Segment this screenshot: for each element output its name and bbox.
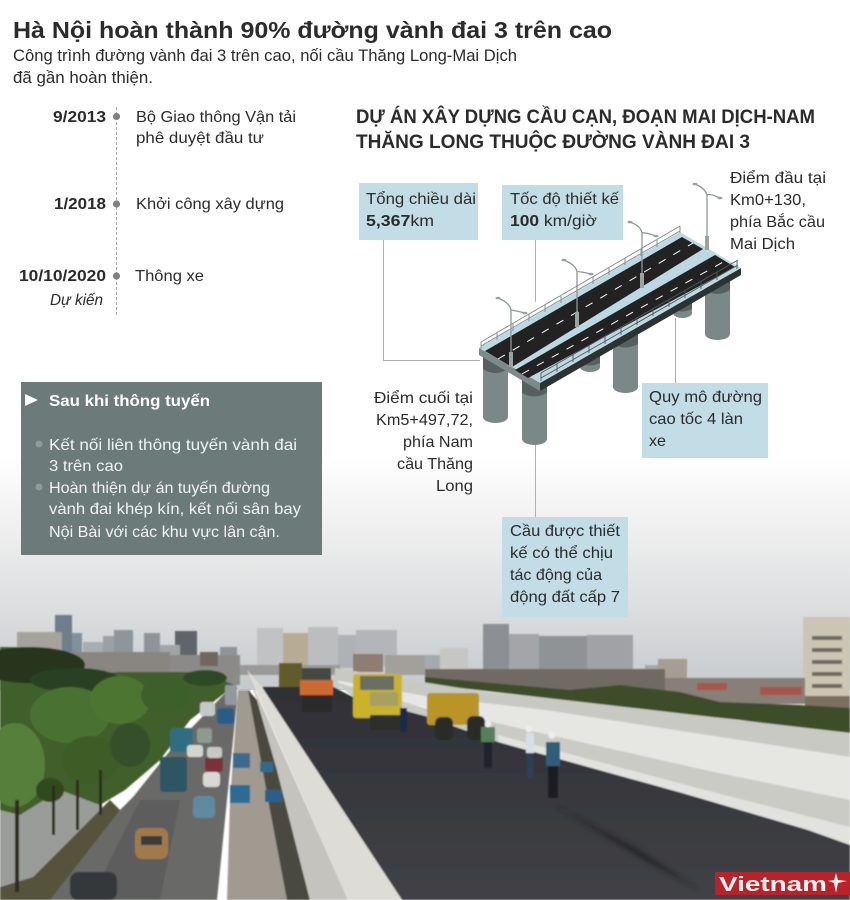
- right skyline: [425, 655, 440, 670]
- panel heading: Sau khi thông tuyến: [49, 393, 210, 410]
- central skyline: [257, 628, 283, 670]
- logo: Vietnam+: Vietnam: [719, 874, 827, 896]
- subtitle: đã gần hoàn thiện.: [13, 69, 153, 87]
- background photo: road construction: [0, 455, 850, 900]
- deck top: [479, 232, 741, 383]
- callout: total length: Tổng chiều dài: [366, 190, 476, 208]
- concrete parapet, left: [247, 672, 348, 900]
- callout: road scale: cao tốc 4 làn: [649, 411, 743, 428]
- deck side: [540, 268, 741, 391]
- callout: design speed: [502, 185, 623, 240]
- asphalt deck: [260, 687, 850, 900]
- milestone: 1/2018: Khởi công xây dựng: [136, 196, 284, 213]
- callout: road scale: Quy mô đường: [649, 389, 762, 406]
- back barrier: [335, 668, 850, 757]
- note: start point: [730, 169, 826, 253]
- bullet list: Nội Bài với các khu vực lân cận.: [49, 524, 280, 541]
- milestone: 10/10/2020: Dự kiến: [50, 292, 103, 309]
- lane markings: [498, 243, 693, 359]
- subtitle: [13, 47, 517, 87]
- left street: [37, 685, 237, 900]
- milestone: 9/2013: Bộ Giao thông Vận tải: [136, 109, 296, 126]
- note: start point: Điểm đầu tại: [730, 169, 826, 187]
- note: end point: Điểm cuối tại: [374, 389, 473, 407]
- bullet list: Hoàn thiện dự án tuyến đường: [49, 480, 270, 497]
- callout: total length: [359, 183, 478, 240]
- bullet list: 3 trên cao: [49, 458, 123, 475]
- note: start point: Mai Dịch: [730, 236, 795, 253]
- callout: earthquake resistance: động đất cấp 7: [510, 589, 620, 606]
- cars: [70, 685, 237, 900]
- milestone: 9/2013: [53, 109, 296, 147]
- workers: [481, 721, 560, 798]
- callout: design speed: Tốc độ thiết kế: [510, 191, 619, 208]
- left sidewalk: [0, 770, 110, 887]
- callout: total length: 5,367 km: [366, 213, 434, 230]
- pillars: [483, 270, 730, 445]
- note: end point: [374, 389, 473, 495]
- lanes: [485, 237, 703, 367]
- bullet list: [36, 437, 301, 541]
- callout: earthquake resistance: [502, 517, 628, 617]
- milestone: 9/2013: phê duyệt đầu tư: [136, 130, 264, 147]
- subtitle: Công trình đường vành đai 3 trên cao, nối cầu Thăng Long-Mai Dịch: [13, 47, 517, 65]
- callout: earthquake resistance: tác động của: [510, 567, 602, 584]
- note: end point: phía Nam: [403, 434, 473, 451]
- low houses: [425, 669, 665, 691]
- left skyline: [55, 615, 72, 655]
- milestone: 9/2013: 9/2013: [53, 109, 106, 126]
- icon: triangle: [25, 394, 38, 406]
- note: end point: Km5+497,72,: [376, 412, 473, 429]
- milestone: 10/10/2020: Thông xe: [135, 268, 204, 285]
- note: end point: cầu Thăng: [397, 456, 473, 473]
- callout: earthquake resistance: Cầu được thiết: [510, 523, 621, 540]
- project heading: THĂNG LONG THUỘC ĐƯỜNG VÀNH ĐAI 3: [356, 129, 750, 153]
- railings: [481, 226, 738, 381]
- white deck, right: [335, 670, 850, 810]
- note: start point: phía Bắc cầu: [730, 212, 825, 231]
- note: end point: Long: [436, 478, 473, 495]
- distant trees, right: [425, 677, 850, 736]
- timeline: [19, 107, 296, 315]
- tree canopy: [0, 647, 235, 815]
- project heading: [356, 104, 815, 153]
- logo: Vietnam+: [715, 872, 850, 896]
- street lamps: [498, 184, 720, 367]
- title: Hà Nội hoàn thành 90% đường vành đai 3 trên cao: [13, 17, 612, 43]
- rollers: [279, 663, 302, 687]
- bullet list: Kết nối liên thông tuyến vành đai: [49, 437, 297, 454]
- bullet list: vành đai khép kín, kết nối sân bay: [49, 501, 301, 518]
- milestone: 10/10/2020: [19, 268, 204, 309]
- milestone: 1/2018: 1/2018: [54, 196, 106, 213]
- bridge illustration: [479, 183, 741, 445]
- milestone: 1/2018: [54, 196, 284, 213]
- callout: design speed: 100 km/giờ: [510, 213, 598, 230]
- front barrier: [335, 682, 850, 845]
- project heading: DỰ ÁN XÂY DỰNG CẦU CẠN, ĐOẠN MAI DỊCH-NAM: [356, 104, 815, 128]
- panel: after opening: [21, 382, 322, 555]
- callout: road scale: xe: [649, 433, 666, 450]
- milestone: 10/10/2020: 10/10/2020: [19, 268, 106, 285]
- sidewalk under viaduct: [227, 690, 288, 900]
- leader lines: [384, 240, 676, 517]
- callout: earthquake resistance: kế có thể chịu: [510, 544, 613, 562]
- callout: road scale: [642, 383, 768, 458]
- note: start point: Km0+130,: [730, 192, 806, 209]
